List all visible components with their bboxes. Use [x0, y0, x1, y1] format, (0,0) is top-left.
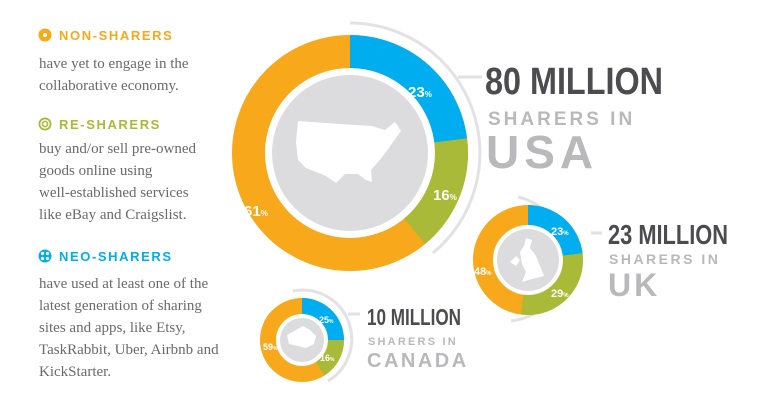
legend: re-sharers: buy and/or sell pre-owned [39, 141, 197, 157]
donut: UK [474, 197, 602, 321]
legend: non-sharers: have yet to engage in the [39, 56, 189, 72]
donut: Canada: 16% [320, 353, 335, 363]
label: Canada [367, 304, 469, 372]
donut: USA [244, 23, 482, 254]
label: UK [608, 219, 728, 303]
label: UK: SHARERS IN [609, 251, 720, 267]
donut: UK: 48% [474, 266, 492, 278]
icon: non-sharers [38, 28, 52, 42]
legend: non-sharers: NON-SHARERS [59, 28, 173, 43]
label: USA [485, 61, 663, 178]
donut: UK: 29% [551, 288, 569, 300]
legend: re-sharers: like eBay and Craigslist. [39, 207, 186, 223]
donut: Canada: 25% [319, 315, 334, 325]
legend: neo-sharers: NEO-SHARERS [59, 249, 173, 264]
icon: neo-sharers [38, 250, 52, 262]
donut: Canada: 59% [263, 342, 278, 352]
label: USA: USA [486, 126, 598, 178]
label: Canada: SHARERS IN [368, 336, 458, 348]
label: USA: 80 MILLION [485, 61, 663, 103]
donut: Canada [263, 290, 360, 381]
label: USA: SHARERS IN [488, 109, 635, 130]
donut: USA: 23% [408, 84, 432, 101]
legend: neo-sharers: have used at least one of the [39, 276, 208, 292]
legend: non-sharers [38, 28, 189, 94]
icon: Canada map [287, 326, 316, 348]
label: Canada: CANADA [367, 350, 469, 372]
legend: neo-sharers [38, 249, 219, 380]
legend: neo-sharers: sites and apps, like Etsy, [39, 320, 186, 336]
legend: neo-sharers: latest generation of sharing [39, 298, 202, 314]
label: Canada: 10 MILLION [367, 304, 461, 330]
legend: re-sharers: RE-SHARERS [59, 117, 161, 132]
legend: neo-sharers: TaskRabbit, Uber, Airbnb and [39, 342, 219, 358]
legend: re-sharers: goods online using [39, 163, 153, 179]
label: UK: 23 MILLION [608, 219, 728, 250]
legend: non-sharers: collaborative economy. [39, 78, 179, 94]
label: UK: UK [608, 267, 660, 303]
icon: UK map [510, 238, 544, 282]
donut: USA: 61% [244, 203, 268, 220]
icon: re-sharers [38, 118, 52, 130]
donut: USA: 16% [433, 187, 457, 204]
legend: re-sharers: well-established services [39, 185, 189, 201]
legend: re-sharers [38, 117, 197, 223]
legend: neo-sharers: KickStarter. [39, 364, 111, 380]
icon: USA map [296, 121, 401, 183]
donut: UK: 23% [551, 226, 569, 238]
